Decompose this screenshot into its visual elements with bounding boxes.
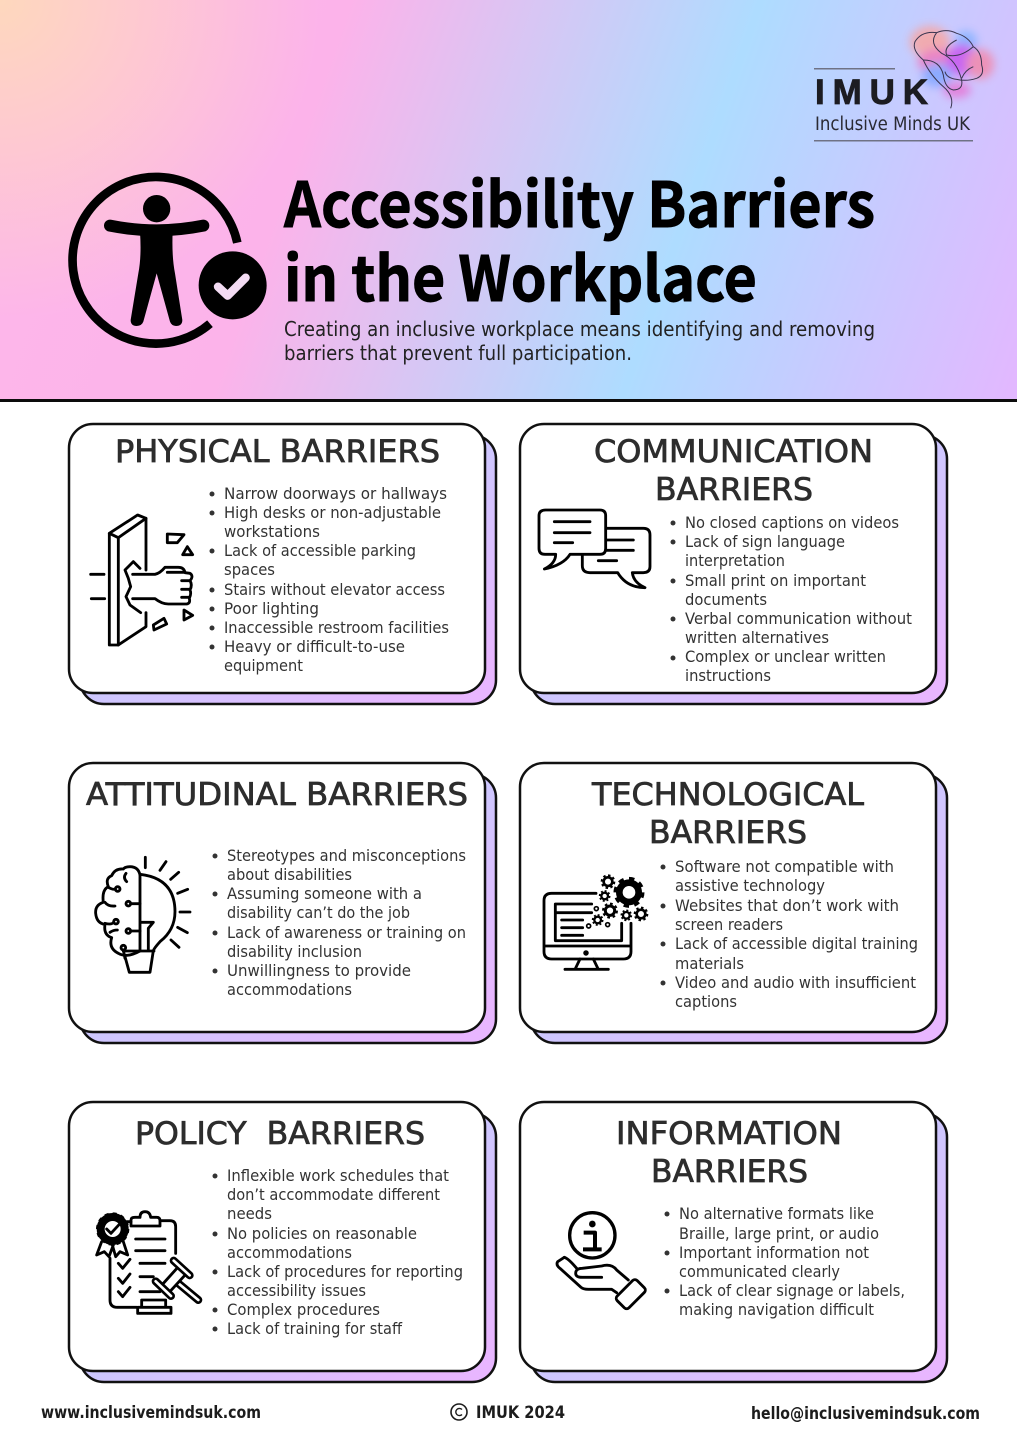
list: policy barriers [212,1166,463,1338]
list: attitudinal barriers: Unwillingness to provide [227,961,411,980]
list: policy barriers: Inflexible work schedules that [227,1166,449,1185]
icon: speech bubbles [539,510,650,588]
list: technological barriers: screen readers [675,915,783,934]
list: attitudinal barriers [212,846,466,999]
list: physical barriers: equipment [224,656,303,675]
panel: communication barriers [520,424,947,704]
list: policy barriers: No policies on reasonable [227,1224,417,1243]
list: attitudinal barriers: Stereotypes and misconceptions [227,846,466,865]
list: physical barriers: workstations [224,522,320,541]
list: information barriers: No alternative formats like [679,1204,874,1223]
subtitle [284,317,875,365]
copyright: IMUK 2024 [476,1403,565,1422]
list: information barriers: making navigation difficult [679,1300,874,1319]
list: policy barriers: Lack of training for staff [227,1319,403,1338]
list: physical barriers: spaces [224,560,275,579]
list: physical barriers: Inaccessible restroom facilities [224,618,449,637]
panel: technological barriers [520,763,947,1043]
title: Accessibility Barriers [283,155,875,245]
heading: information barriers: BARRIERS [651,1154,808,1190]
logo: IMUK: IMUK [815,73,928,112]
icon: brain light bulb [96,857,190,972]
heading: attitudinal barriers: ATTITUDINAL BARRIERS [86,777,468,813]
list: physical barriers: Stairs without elevator access [224,580,445,599]
heading: technological barriers [591,777,865,851]
icon: clipboard rosette gavel [97,1212,198,1313]
list: communication barriers: interpretation [685,551,785,570]
panel: attitudinal barriers [69,763,496,1043]
list: information barriers: Braille, large print, or audio [679,1224,879,1243]
title [283,155,875,319]
icon: computer with gears [544,875,647,969]
list: attitudinal barriers: about disabilities [227,865,352,884]
heading: communication barriers: COMMUNICATION [594,434,873,470]
header background [0,0,1017,402]
heading: technological barriers: BARRIERS [649,815,807,851]
icon: hand holding information [557,1213,647,1310]
panel: physical barriers [69,424,496,704]
list: technological barriers: materials [675,954,744,973]
list: technological barriers: Lack of accessible digital training [675,934,918,953]
list: information barriers: Important information not [679,1243,869,1262]
list: policy barriers: don’t accommodate different [227,1185,440,1204]
list: information barriers [664,1204,905,1319]
list: physical barriers: Heavy or difficult-to-use [224,637,405,656]
list: communication barriers: Verbal communication without [685,609,912,628]
list: policy barriers: Complex procedures [227,1300,380,1319]
list: communication barriers: Small print on important [685,571,866,590]
list: attitudinal barriers: disability inclusion [227,942,362,961]
heading: policy barriers: POLICY BARRIERS [135,1116,425,1152]
list: physical barriers: Lack of accessible parking [224,541,416,560]
logo: IMUK: Inclusive Minds UK [815,114,971,135]
list: physical barriers: Poor lighting [224,599,319,618]
list: attitudinal barriers: accommodations [227,980,352,999]
subtitle: barriers that prevent full participation. [284,341,632,365]
list: technological barriers: assistive technology [675,876,825,895]
list: physical barriers [210,484,449,675]
list: physical barriers: Narrow doorways or hallways [224,484,447,503]
email: hello@inclusivemindsuk.com [751,1404,980,1423]
list: technological barriers: Software not compatible with [675,857,894,876]
list: attitudinal barriers: Lack of awareness or training on [227,923,466,942]
panel: information barriers [520,1102,947,1382]
subtitle: Creating an inclusive workplace means identifying and removing [284,317,875,341]
icon: fist through door [91,515,193,645]
list: policy barriers: accommodations [227,1243,352,1262]
list: physical barriers: High desks or non-adjustable [224,503,441,522]
list: policy barriers: Lack of procedures for reporting [227,1262,463,1281]
list: policy barriers: accessibility issues [227,1281,366,1300]
list: communication barriers: documents [685,590,767,609]
heading: information barriers: INFORMATION [616,1116,842,1152]
list: technological barriers: captions [675,992,737,1011]
list: communication barriers: No closed captions on videos [685,513,899,532]
list: communication barriers [670,513,912,685]
list: information barriers: communicated clearly [679,1262,840,1281]
list: communication barriers: Complex or unclear written [685,647,886,666]
logo: IMUK [814,26,994,142]
heading: communication barriers [594,434,873,508]
heading: physical barriers: PHYSICAL BARRIERS [115,434,440,470]
heading: information barriers [616,1116,842,1190]
list: communication barriers: written alternatives [685,628,829,647]
list: communication barriers: Lack of sign language [685,532,845,551]
list: policy barriers: needs [227,1204,272,1223]
list: technological barriers [660,857,918,1011]
heading: communication barriers: BARRIERS [655,472,813,508]
list: technological barriers: Video and audio with insufficient [675,973,916,992]
list: attitudinal barriers: Assuming someone with a [227,884,422,903]
website: www.inclusivemindsuk.com [41,1403,261,1422]
list: communication barriers: instructions [685,666,771,685]
icon: accessibility figure with check [73,177,267,344]
list: information barriers: Lack of clear signage or labels, [679,1281,905,1300]
list: attitudinal barriers: disability can’t do the job [227,903,410,922]
heading: technological barriers: TECHNOLOGICAL [591,777,865,813]
footer [41,1403,980,1423]
title: in the Workplace [284,229,757,319]
list: technological barriers: Websites that don’t work with [675,896,899,915]
panel: policy barriers [69,1102,496,1382]
